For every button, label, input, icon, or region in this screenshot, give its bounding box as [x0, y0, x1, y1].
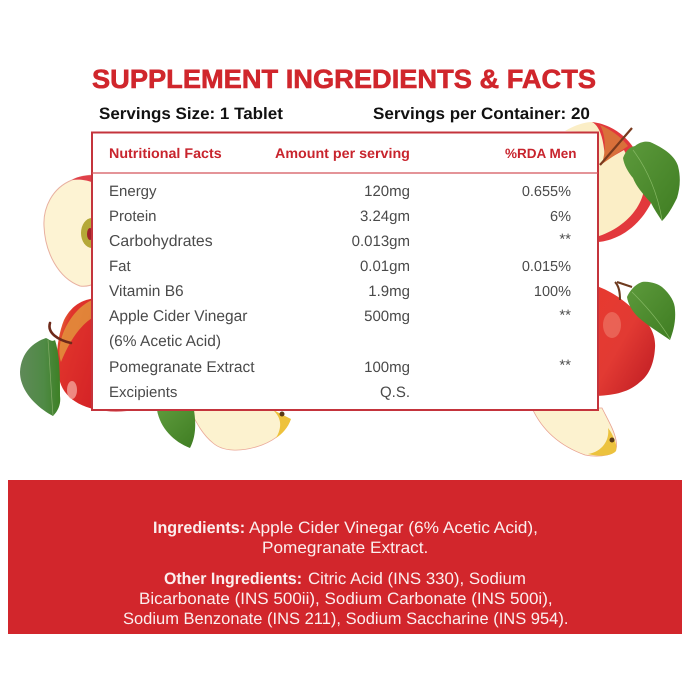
icon: left apple stem — [50, 323, 71, 343]
amount per serving values: 0.01gm — [360, 258, 410, 275]
amount per serving values: 100mg — [364, 359, 410, 376]
nutrient names: Energy — [109, 183, 157, 200]
panel: ingredients band — [8, 480, 682, 634]
RDA percentage values — [522, 184, 571, 374]
RDA percentage values: 6% — [550, 209, 571, 225]
amount per serving values — [352, 183, 410, 401]
amount per serving values: 120mg — [364, 183, 410, 200]
ingredients text — [153, 519, 538, 557]
icon: bottom right apple slice — [532, 408, 617, 456]
nutrient names: Excipients — [109, 384, 177, 401]
ingredients text: Apple Cider Vinegar (6% Acetic Acid), — [249, 519, 538, 537]
amount per serving values: 1.9mg — [368, 283, 410, 300]
other ingredients text: Citric Acid (INS 330), Sodium — [308, 570, 526, 588]
icon: top right leaf — [623, 142, 680, 221]
nutrient names — [109, 183, 255, 401]
other ingredients text: Sodium Benzonate (INS 211), Sodium Saccharine (INS 954). — [123, 610, 568, 628]
amount per serving values: 500mg — [364, 308, 410, 325]
amount per serving values: Q.S. — [380, 384, 410, 401]
nutrient names: Pomegranate Extract — [109, 359, 255, 376]
RDA percentage values: 0.655% — [522, 184, 571, 200]
icon: top right apple half — [565, 122, 651, 242]
title: SUPPLEMENT INGREDIENTS & FACTS — [92, 64, 596, 94]
RDA percentage values: ** — [559, 307, 571, 324]
ingredients text: Pomegranate Extract. — [262, 539, 428, 557]
table header: %RDA Men — [505, 146, 577, 161]
amount per serving values: 0.013gm — [352, 233, 410, 250]
icon: right whole apple — [590, 284, 655, 396]
other ingredients text: Other Ingredients: — [164, 570, 302, 588]
RDA percentage values: 0.015% — [522, 259, 571, 275]
icon: bottom left apple slice — [190, 410, 291, 450]
table header — [109, 145, 577, 161]
nutrient names: Fat — [109, 258, 132, 275]
panel: nutrition table — [92, 132, 598, 410]
table header: Amount per serving — [275, 145, 410, 161]
servings size: Servings Size: 1 Tablet — [99, 105, 283, 123]
icon: left leaf — [20, 338, 60, 416]
ingredients text: Ingredients: — [153, 519, 245, 537]
nutrient names: Apple Cider Vinegar — [109, 308, 247, 325]
icon: right apple stem — [615, 282, 632, 300]
RDA percentage values: ** — [559, 231, 571, 248]
other ingredients text — [123, 570, 568, 628]
amount per serving values: 3.24gm — [360, 208, 410, 225]
nutrient names: Carbohydrates — [109, 233, 213, 250]
nutrient names: Protein — [109, 208, 157, 225]
RDA percentage values: ** — [559, 357, 571, 374]
icon: bottom left leaf — [157, 410, 195, 448]
other ingredients text: Bicarbonate (INS 500ii), Sodium Carbonate (INS 500i), — [139, 590, 553, 608]
icon: right leaf — [627, 282, 675, 340]
nutrient names: (6% Acetic Acid) — [109, 333, 221, 350]
icon: left whole apple — [57, 298, 127, 411]
servings per container: Servings per Container: 20 — [373, 105, 590, 123]
RDA percentage values: 100% — [534, 284, 571, 300]
nutrient names: Vitamin B6 — [109, 283, 184, 300]
icon: left apple half — [44, 175, 103, 286]
table header: Nutritional Facts — [109, 145, 222, 161]
